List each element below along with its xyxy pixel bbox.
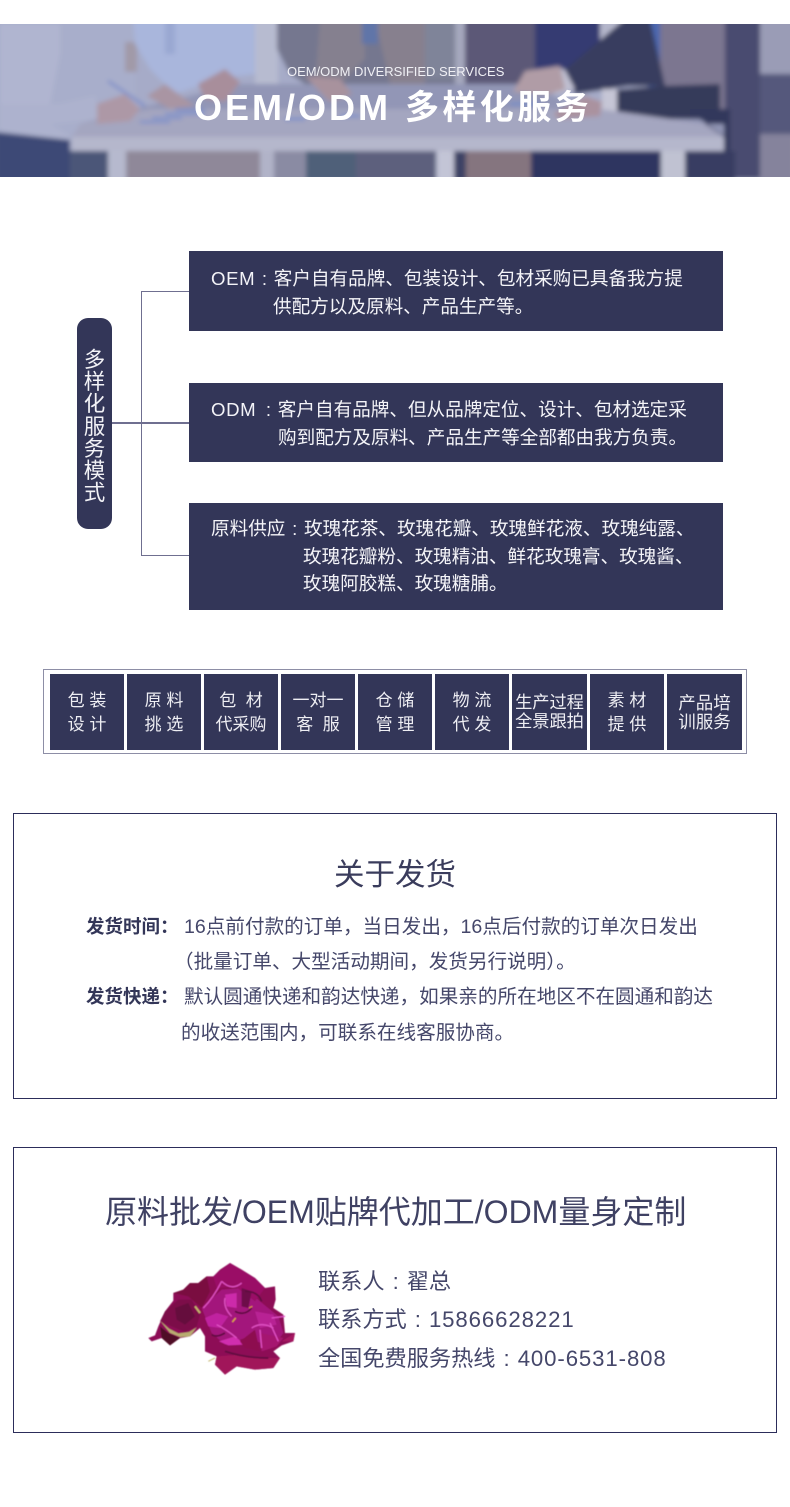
service: raw material selection: 原 料 [145,691,183,710]
service: one-on-one support: 一对一 [292,691,344,710]
banner title: OEM/ODM [194,87,391,128]
service: raw material selection: 挑 选 [145,715,183,734]
service mode vertical label: 式 [84,481,105,505]
panel: ODM: 购到配方及原料、产品生产等全部都由我方负责。 [278,427,687,448]
icon: dried rose [148,1262,296,1376]
service: product training: 训服务 [678,712,731,732]
service mode vertical label [77,318,112,529]
service: warehousing [358,674,432,750]
service: packaging design: 包 装 [68,691,106,710]
panel: raw material supply: 玫瑰花瓣粉、玫瑰精油、鲜花玫瑰膏、玫瑰酱、 [303,546,693,567]
shipping time text: 发货时间： [86,916,179,937]
courier text: 发货快递： [86,986,179,1007]
service mode vertical label: 模 [84,459,105,483]
panel: raw material supply [189,503,723,610]
panel: ODM: : [266,399,271,420]
contact person: : [393,1269,399,1294]
panel: OEM: OEM 客户自有品牌、包装设计、包材采购已具备我方提 [211,268,683,289]
courier text: 的收送范围内，可联系在线客服协商。 [181,1022,514,1044]
service: warehousing: 管 理 [376,715,414,734]
contact phone: : [415,1307,421,1332]
panel: contact [13,1147,777,1433]
contact heading: 原料批发/OEM贴牌代加工/ODM量身定制 [105,1194,686,1230]
panel: ODM [189,383,723,462]
service: production tracking [512,674,587,750]
panel: raw material supply: 玫瑰阿胶糕、玫瑰糖脯。 [303,573,508,594]
services strip [43,669,747,754]
service: logistics: 物 流 [453,691,491,710]
service: raw material selection [127,674,201,750]
service: warehousing: 仓 储 [376,691,414,710]
shipping heading: 关于发货 [334,858,456,892]
service: production tracking: 全景跟拍 [515,711,584,731]
banner subtitle: OEM/ODM DIVERSIFIED SERVICES [287,64,504,79]
panel: OEM: 供配方以及原料、产品生产等。 [273,296,533,317]
contact person: 联系人 翟总 [318,1269,451,1294]
panel: raw material supply: : [292,518,297,539]
service: one-on-one support [281,674,355,750]
service: one-on-one support: 客 服 [296,715,340,734]
service: product training [667,674,742,750]
service mode vertical label: 服 [84,415,105,439]
service mode vertical label: 样 [84,370,105,394]
service: materials [590,674,664,750]
panel: about shipping [13,813,777,1099]
service mode vertical label: 务 [84,437,105,461]
service: production tracking: 生产过程 [515,692,584,712]
service mode vertical label: 化 [84,392,105,416]
service: materials: 素 材 [608,691,646,710]
service: packaging procurement: 代采购 [216,715,266,734]
banner title [194,87,592,128]
service: materials: 提 供 [608,715,646,734]
panel: OEM: : [262,268,267,289]
service: logistics [435,674,509,750]
service: product training: 产品培 [678,693,731,713]
service: packaging design [50,674,124,750]
banner title: 多样化服务 [405,89,592,127]
panel: raw material supply: 原料供应 玫瑰花茶、玫瑰花瓣、玫瑰鲜花液、玫瑰纯露、 [211,518,694,539]
courier text: 默认圆通快递和韵达快递，如果亲的所在地区不在圆通和韵达 [184,986,713,1008]
connector lines [112,291,189,556]
hotline: : [504,1346,510,1371]
service: packaging design: 设 计 [68,715,106,734]
service: packaging procurement [204,674,278,750]
service mode vertical label: 多 [84,348,105,372]
contact phone: 联系方式 15866628221 [318,1307,575,1332]
service: logistics: 代 发 [453,715,491,734]
shipping time text: 16点前付款的订单，当日发出，16点后付款的订单次日发出 [184,916,698,938]
courier text [86,986,713,1044]
banner [0,24,790,177]
banner photo: business meeting [0,24,790,177]
hotline: 全国免费服务热线 400-6531-808 [318,1346,667,1371]
shipping time text [86,916,698,973]
panel: OEM [189,251,723,331]
shipping time text: （批量订单、大型活动期间，发货另行说明）。 [174,951,576,973]
panel: ODM: ODM 客户自有品牌、但从品牌定位、设计、包材选定采 [211,399,687,420]
service: packaging procurement: 包 材 [219,691,263,710]
